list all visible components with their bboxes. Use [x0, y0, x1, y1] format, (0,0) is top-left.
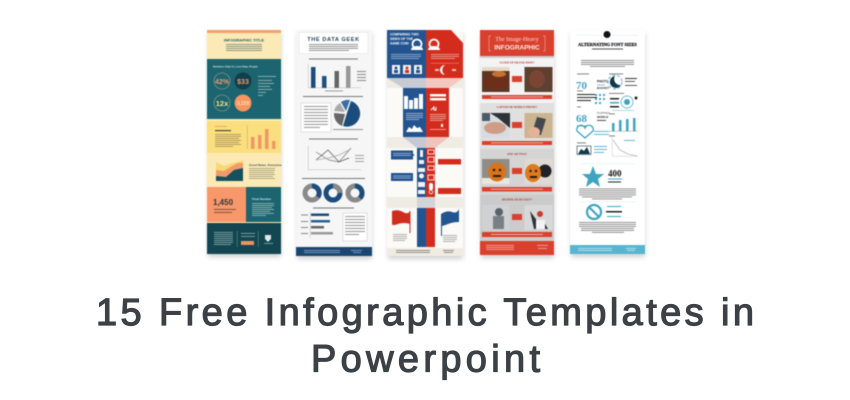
title — [96, 292, 754, 380]
template 2: the data geek: THE DATA GEEK — [307, 37, 360, 43]
template 2: the data geek — [296, 30, 372, 259]
template 4: the image-heavy infographic: The Image-Heavy — [495, 37, 539, 43]
template 5: alternating font sizes: ALTERNATING FONT SIZES — [578, 42, 637, 47]
template 5: alternating font sizes — [570, 30, 645, 257]
template 1: infographic title: $33 — [237, 79, 249, 86]
template 1: infographic title: 42% — [215, 79, 230, 86]
template 1: infographic title: Final Number — [252, 197, 272, 201]
title: Powerpoint — [311, 338, 540, 380]
template 1: infographic title: 1,450 — [213, 198, 234, 207]
template 1: infographic title: INFOGRAPHIC TITLE — [224, 38, 264, 42]
template 3: comparing two sides of the same coin: COMPARING TWO — [390, 32, 419, 36]
template 5: alternating font sizes: WORLD — [597, 115, 609, 119]
template 5: alternating font sizes: 70 — [576, 80, 588, 92]
template 4: the image-heavy infographic: INFOGRAPHIC — [494, 44, 540, 52]
template 1: infographic title — [207, 30, 282, 257]
template 5: alternating font sizes: PUPPIES — [597, 111, 610, 115]
template 4: the image-heavy infographic — [480, 30, 554, 258]
title: 15 Free Infographic Templates in — [96, 292, 754, 334]
template 5: alternating font sizes: 400 — [608, 168, 622, 178]
template 3: comparing two sides of the same coin — [387, 30, 463, 259]
template 5: alternating font sizes: 68 — [576, 113, 588, 125]
template 1: infographic title: 12x — [216, 99, 229, 108]
template 1: infographic title: 3,159 — [237, 101, 249, 107]
template 4: the image-heavy infographic: LAPTOP OR MOBILE PHONE? — [497, 106, 538, 109]
template 4: the image-heavy infographic: HIGHER OR BUCKET? — [502, 198, 533, 202]
template 4: the image-heavy infographic: CLOSE-UP OR FAR AWAY? — [499, 62, 535, 64]
template 4: the image-heavy infographic: ONE OR TWO? — [507, 153, 528, 156]
template 1: infographic title: Numbers Help Us Love Data, People — [213, 64, 258, 68]
template 5: alternating font sizes: BUCKET — [597, 86, 609, 90]
template 5: alternating font sizes: PHOTO — [597, 80, 609, 84]
template 3: comparing two sides of the same coin: SIDES OF THE — [390, 37, 414, 41]
template 1: infographic title: Good News, Everyone — [249, 163, 282, 167]
template 3: comparing two sides of the same coin: SAME COIN — [390, 42, 409, 46]
